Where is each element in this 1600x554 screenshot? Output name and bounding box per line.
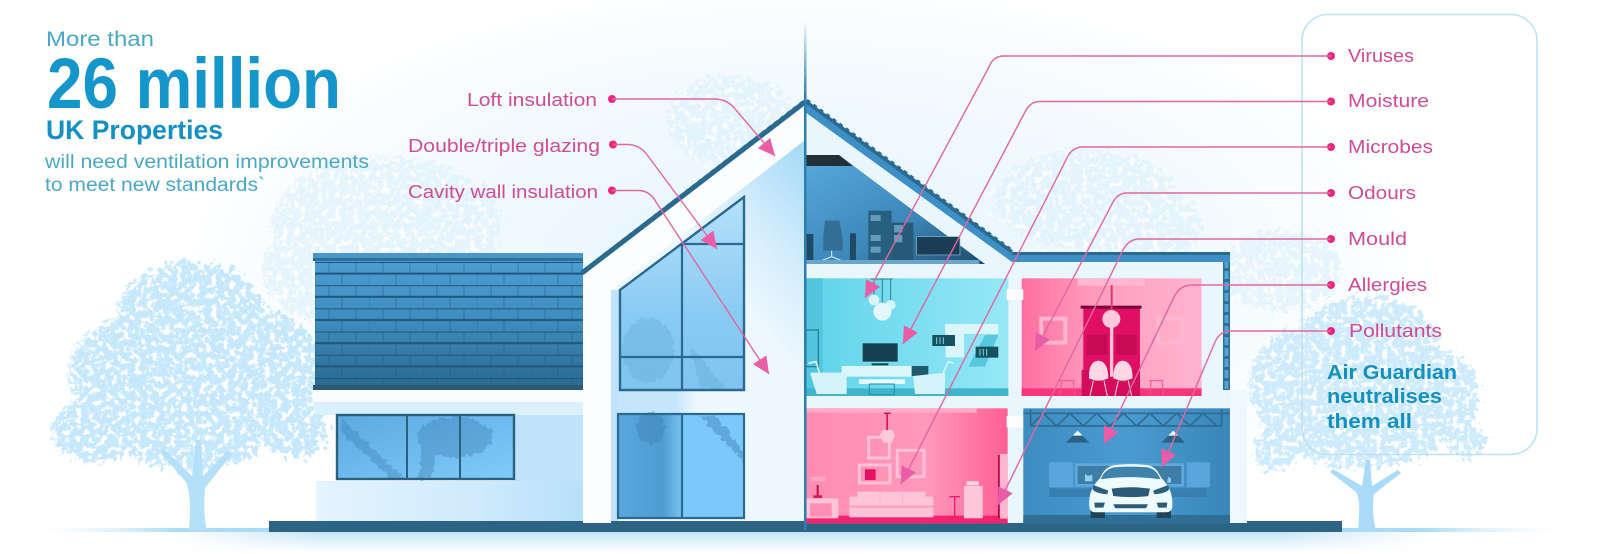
icon: gable upper window — [620, 197, 744, 390]
icon: pendant lamp — [869, 279, 896, 321]
label: loft insulation: Loft insulation — [467, 90, 597, 110]
label: viruses — [865, 46, 1414, 298]
icon: lounge frames — [859, 437, 924, 483]
panel: bedroom pink — [1007, 278, 1202, 396]
ground shadow — [170, 532, 1430, 552]
icon: pendant and stem — [1102, 285, 1120, 377]
text: 26 million: 26 million — [47, 45, 341, 124]
label: microbes — [901, 137, 1433, 484]
icon: car — [1089, 464, 1172, 518]
panel: gable face left — [611, 140, 805, 521]
icon: garage lights — [1066, 431, 1185, 443]
callout text: Air Guardian: them all — [1327, 411, 1412, 433]
plinth — [269, 521, 1342, 532]
text: more than: More than — [46, 28, 154, 51]
label: moisture: Moisture — [1348, 91, 1429, 111]
icon: stools — [1059, 381, 1163, 396]
text: ventilation statement: will need ventilation improvements — [44, 152, 369, 173]
label: microbes: Microbes — [1348, 137, 1433, 157]
label: cavity wall insulation: Cavity wall insulation — [408, 182, 598, 202]
label: double/triple glazing: Double/triple glazing — [408, 136, 600, 156]
icon: chairs — [1089, 361, 1133, 381]
label: viruses: Viruses — [1348, 46, 1414, 66]
panel: lounge pink — [806, 408, 1023, 523]
roof right — [805, 100, 1230, 262]
label: odours: Odours — [1348, 183, 1416, 203]
label: cavity wall insulation — [408, 182, 769, 374]
background trees — [260, 75, 1340, 325]
label: allergies — [1104, 275, 1427, 444]
label: moisture — [903, 91, 1429, 344]
panel: left wing roof tiles — [313, 253, 583, 390]
icon: sliding glass door — [618, 412, 744, 518]
tree left — [51, 262, 327, 530]
callout box — [1302, 14, 1537, 454]
panel: living room cyan — [806, 278, 1008, 396]
panel: gable band below window — [611, 390, 696, 414]
panel: garage — [1023, 408, 1230, 523]
callout text: Air Guardian — [1327, 362, 1457, 433]
icon: double doors — [1081, 306, 1142, 396]
icon: tv and unit — [842, 343, 928, 395]
label: mould: Mould — [1348, 229, 1407, 249]
headline block — [44, 28, 369, 196]
text: ventilation statement — [44, 152, 369, 196]
icon: roof truss — [1023, 409, 1230, 427]
callout text: Air Guardian: neutralises — [1327, 386, 1442, 408]
label: mould — [998, 229, 1407, 505]
text: ventilation statement: to meet new standards` — [45, 175, 265, 196]
roof edge left — [582, 102, 805, 273]
house — [269, 100, 1342, 532]
callout text: Air Guardian: Air Guardian — [1327, 362, 1457, 384]
icon: door edge — [998, 454, 1008, 519]
panel: gable blue strip — [611, 290, 619, 521]
panel: left wing wall — [313, 390, 583, 521]
panel: attic room — [806, 155, 985, 264]
icon: storage units — [1049, 462, 1210, 497]
label: pollutants — [1162, 321, 1442, 467]
icon: wall shelves — [932, 324, 998, 367]
icon: picture frames — [1041, 319, 1182, 343]
label: pollutants: Pollutants — [1349, 321, 1442, 341]
text: UK Properties: UK Properties — [46, 115, 223, 145]
label: double/triple glazing — [408, 136, 717, 249]
panel: right section shell — [806, 112, 1247, 523]
icon: sofas — [810, 373, 945, 394]
icon: lounge lamp — [880, 413, 895, 443]
tree right — [1248, 297, 1485, 530]
label: allergies: Allergies — [1348, 275, 1427, 295]
background glow — [160, 0, 1440, 554]
panel: gable white band and pillar — [582, 102, 805, 523]
ground line — [20, 528, 1580, 532]
icon: side tables — [806, 477, 983, 518]
centre divider line — [804, 20, 806, 530]
icon: sofa — [849, 492, 933, 517]
label: odours — [1035, 183, 1416, 351]
icon: left wing window — [337, 415, 514, 479]
label: loft insulation — [467, 90, 775, 156]
